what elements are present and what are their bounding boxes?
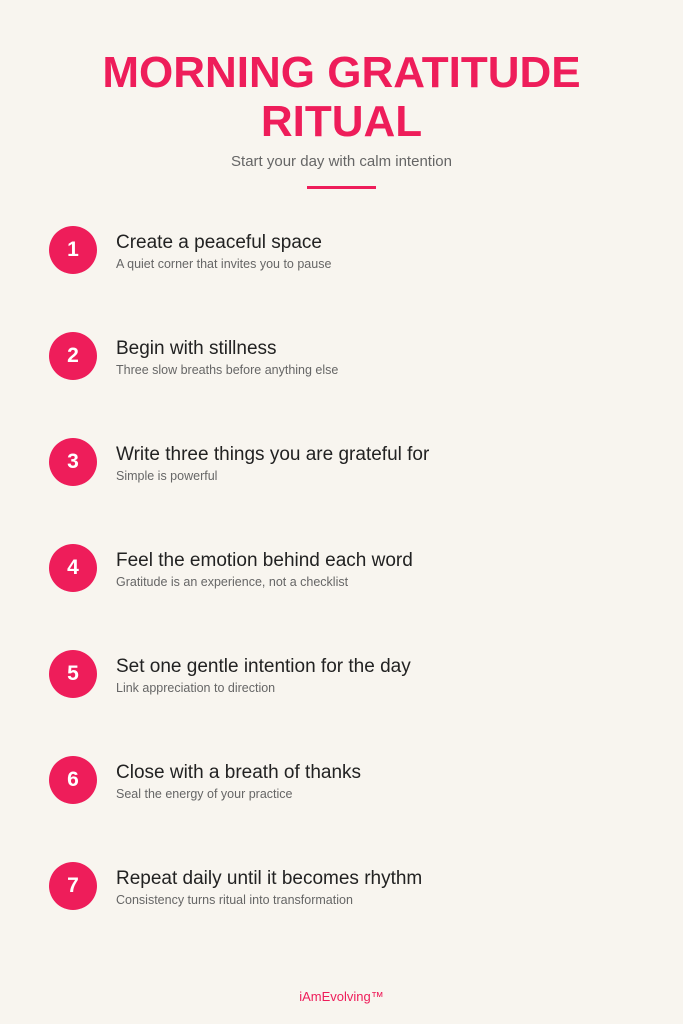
step 1 description: A quiet corner that invites you to pause — [116, 257, 331, 271]
number badge 2 — [49, 332, 97, 380]
step 2 description: Three slow breaths before anything else — [116, 363, 338, 377]
number badge 2: 2 — [67, 344, 79, 367]
step 7 description: Consistency turns ritual into transformation — [116, 893, 353, 907]
number badge 4 — [49, 544, 97, 592]
step 6 — [49, 756, 361, 804]
number badge 5 — [49, 650, 97, 698]
step 7 heading: Repeat daily until it becomes rhythm — [116, 868, 422, 889]
step 5 description: Link appreciation to direction — [116, 681, 275, 695]
number badge 4: 4 — [67, 556, 79, 579]
step 3 — [49, 438, 429, 486]
step 3 heading: Write three things you are grateful for — [116, 444, 429, 465]
step 5 heading: Set one gentle intention for the day — [116, 656, 411, 677]
number badge 1 — [49, 226, 97, 274]
step 4 heading: Feel the emotion behind each word — [116, 550, 413, 571]
step 5 — [49, 650, 411, 698]
number badge 5: 5 — [67, 662, 79, 685]
number badge 6 — [49, 756, 97, 804]
title: MORNING GRATITUDE — [102, 48, 581, 97]
subtitle: Start your day with calm intention — [231, 153, 452, 170]
step 4 description: Gratitude is an experience, not a checklist — [116, 575, 348, 589]
number badge 3 — [49, 438, 97, 486]
number badge 3: 3 — [67, 450, 79, 473]
step 1 heading: Create a peaceful space — [116, 232, 322, 253]
title — [102, 48, 581, 146]
step 2 — [49, 332, 338, 380]
title: RITUAL — [261, 97, 422, 146]
number badge 6: 6 — [67, 768, 79, 791]
step 2 heading: Begin with stillness — [116, 338, 277, 359]
step 4 — [49, 544, 413, 592]
number badge 7: 7 — [67, 874, 79, 897]
step 6 description: Seal the energy of your practice — [116, 787, 292, 801]
step 6 heading: Close with a breath of thanks — [116, 762, 361, 783]
step 7 — [49, 862, 422, 910]
step 1 — [49, 226, 331, 274]
step 3 description: Simple is powerful — [116, 469, 217, 483]
footer brand: iAmEvolving™ — [299, 989, 384, 1004]
number badge 7 — [49, 862, 97, 910]
number badge 1: 1 — [67, 238, 79, 261]
